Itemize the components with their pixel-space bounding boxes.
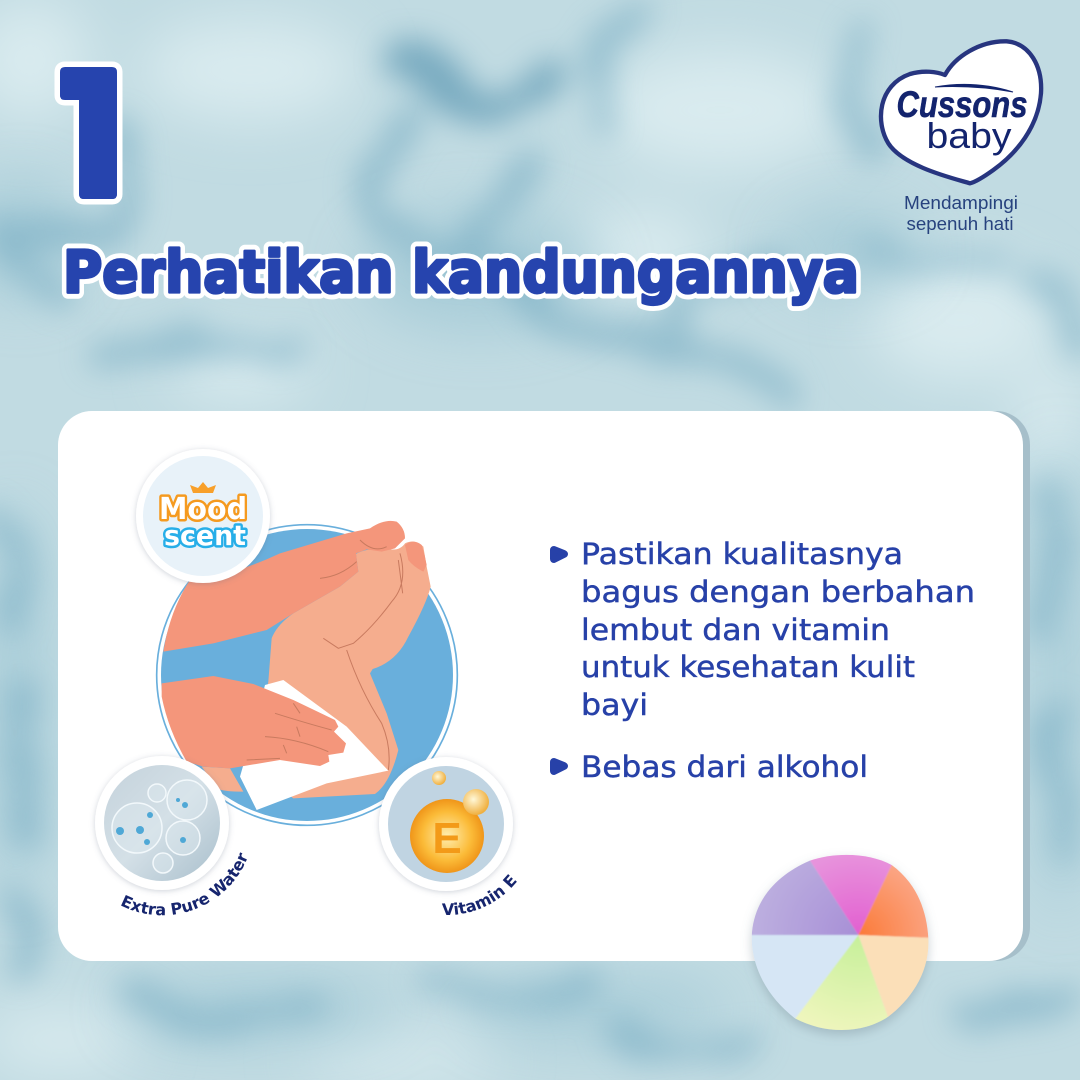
label: Extra Pure Water: Extra Pure Water — [121, 852, 247, 916]
blue disc — [157, 525, 457, 825]
logo tagline — [904, 193, 1018, 234]
logo wordmark: Cussons — [896, 84, 1028, 125]
bullet text 1 — [553, 537, 975, 722]
logo tagline: Mendampingi — [904, 193, 1018, 213]
logo tagline: sepenuh hati — [906, 214, 1014, 234]
bullet text 1: untuk kesehatan kulit — [581, 650, 915, 684]
upper arm — [163, 521, 427, 652]
title: Perhatikan kandungannya — [63, 238, 859, 306]
label: Vitamin E: Vitamin E — [442, 874, 517, 915]
badge: Mood scent — [136, 449, 270, 583]
badge: Vitamin E: E — [432, 814, 462, 863]
number 1: 1 — [35, 25, 141, 240]
logo heart — [881, 41, 1041, 183]
lower baby thigh — [202, 767, 243, 792]
bullet icon — [553, 761, 565, 772]
bullet text 1: bayi — [581, 688, 648, 722]
lower hand — [162, 676, 346, 768]
bullet icon — [553, 549, 565, 560]
logo: Cussons baby — [881, 41, 1041, 234]
leaf icon — [190, 482, 216, 493]
bullet text 1: Pastikan kualitasnya — [581, 537, 903, 571]
baby leg — [253, 541, 431, 798]
bullet text 2: Bebas dari alkohol — [581, 750, 868, 784]
illustration: hands wiping baby with wipe — [157, 521, 457, 825]
logo wordmark: baby — [926, 115, 1012, 156]
badge: Extra Pure Water — [95, 756, 229, 890]
logo wordmark — [896, 84, 1028, 156]
bullet text 1: bagus dengan berbahan — [581, 575, 975, 609]
title: Perhatikan kandungannya — [63, 238, 859, 306]
wipe — [240, 680, 388, 810]
water bubbles — [112, 780, 207, 873]
baby lines — [323, 553, 403, 770]
Mood wordmark: Mood — [159, 492, 247, 527]
number 1 — [54, 62, 122, 204]
scent wordmark: scent — [164, 519, 246, 552]
panel: white card — [58, 411, 1030, 961]
bullet text 1: lembut dan vitamin — [581, 613, 890, 647]
badge: Vitamin E — [379, 757, 513, 891]
toy ball — [747, 854, 934, 1038]
